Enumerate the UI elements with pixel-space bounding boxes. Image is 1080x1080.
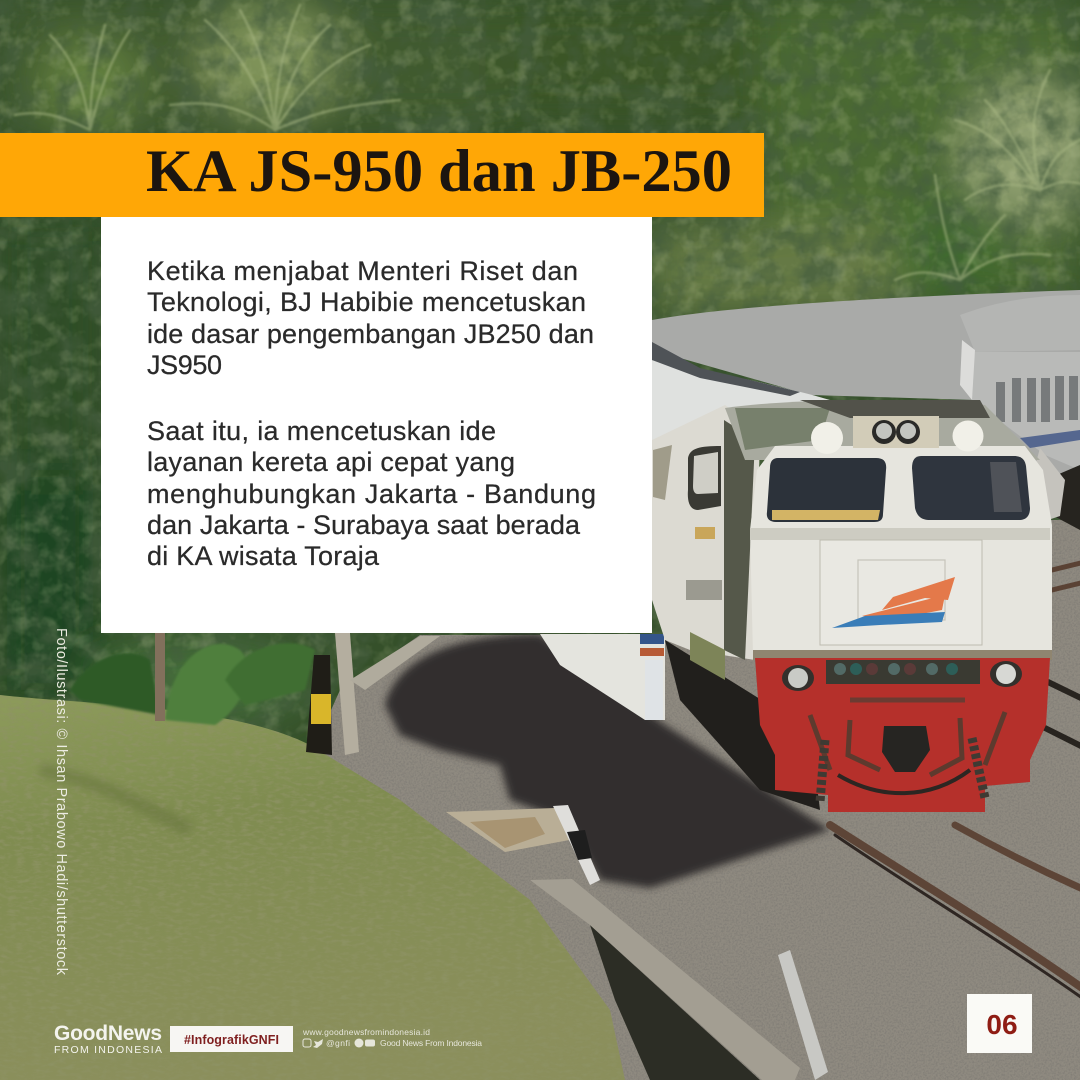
concrete drain edge [530,879,800,1080]
concrete post with yellow band [155,633,440,755]
title banner [0,133,764,217]
logo: GoodNews From Indonesia: GoodNews [54,1022,162,1045]
cab windows [767,456,1030,522]
locomotive [652,400,1052,812]
text block: paragraph 1 [147,256,594,380]
roof lamps [811,416,984,454]
white post foreground [778,950,828,1080]
text block: paragraph 2 [147,416,596,571]
text block: paragraph 1: Ketika menjabat Menteri Riset dan [147,256,578,286]
text block: paragraph 1: JS950 [147,350,222,380]
coupler and chains [810,700,1005,802]
logo: GoodNews From Indonesia: FROM INDONESIA [54,1044,162,1056]
social links [302,1027,482,1048]
text block: paragraph 1: Teknologi, BJ Habibie mencetuskan [147,287,586,317]
sand patch and track marker [446,805,600,885]
page number [967,994,1032,1053]
social links: @gnfi [326,1038,350,1048]
rails [830,562,1080,1000]
body panel [101,217,652,633]
grass slope [0,690,640,1080]
locomotive side [652,405,820,810]
red lower body [755,658,1050,812]
hashtag badge: #InfografikGNFI [184,1033,279,1047]
second coach side [540,342,830,720]
banana plants [70,643,315,725]
text block: paragraph 1: ide dasar pengembangan JB250 dan [147,319,594,349]
rear coaches [652,290,1080,530]
gravel ground [300,520,1080,1080]
text block: paragraph 2: dan Jakarta - Surabaya saat berada [147,510,581,540]
photo credit: Foto/Ilustrasi: © Ihsan Prabowo Hadi/shutterstock [53,628,69,976]
cab roof [725,400,1040,460]
text block: paragraph 2: layanan kereta api cepat yang [147,447,515,477]
text block: paragraph 2: Saat itu, ia mencetuskan ide [147,416,496,446]
social links: Good News From Indonesia [380,1038,482,1048]
cab front body [750,446,1052,655]
railway logo [832,577,955,628]
background photo: foliage [0,0,1080,820]
social links: www.goodnewsfromindonesia.id [302,1027,430,1037]
logo: GoodNews From Indonesia [54,1022,162,1056]
hashtag badge [170,1026,293,1052]
text block: paragraph 2: di KA wisata Toraja [147,541,380,571]
headlights [782,661,1022,691]
palm fronds [15,5,1080,280]
title: KA JS-950 dan JB-250 [146,138,732,204]
train shadow on gravel [385,634,830,888]
page number: 06 [986,1009,1018,1040]
text block: paragraph 2: menghubungkan Jakarta - Bandung [147,479,596,509]
